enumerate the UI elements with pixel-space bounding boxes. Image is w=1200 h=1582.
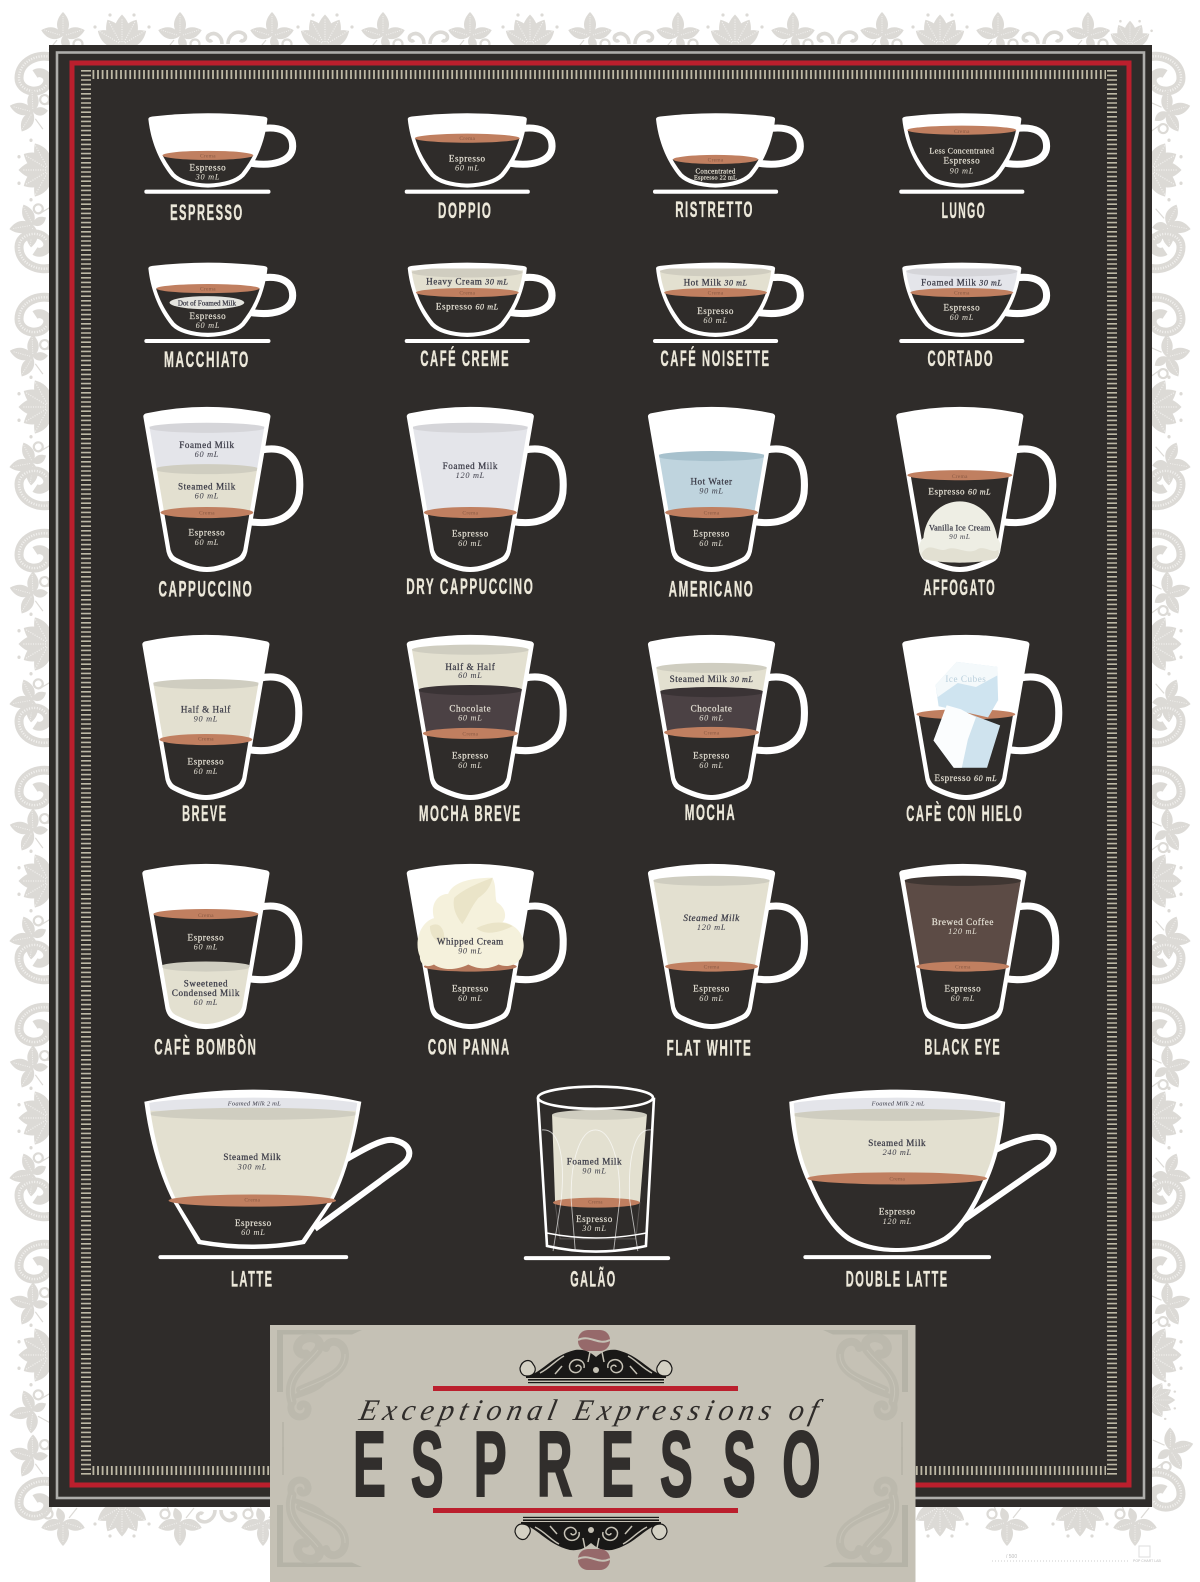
cup: latte: Crema xyxy=(244,1198,261,1204)
mug: cappuccino: Crema xyxy=(199,511,215,517)
cup: lungo: LUNGO xyxy=(942,198,986,223)
cup: espresso: Espresso xyxy=(190,163,226,173)
mug: cappuccino: 60 mL xyxy=(195,538,219,547)
mug: dry cappuccino xyxy=(400,407,563,599)
cup: double latte xyxy=(787,1090,1054,1291)
cup: espresso: 30 mL xyxy=(195,173,220,182)
mug: cafe bombon: Sweetened xyxy=(184,979,228,989)
cup: double latte: Espresso xyxy=(879,1207,916,1217)
glass: galao: GALÃO xyxy=(570,1266,617,1291)
bean top xyxy=(578,1330,610,1351)
bean bottom xyxy=(578,1549,610,1570)
mug: black eye: BLACK EYE xyxy=(924,1034,1001,1059)
mug: cafe con hielo: Ice Cubes xyxy=(945,674,986,684)
cup: cafe noisette: Espresso xyxy=(697,306,734,316)
mug: affogato: Vanilla Ice Cream xyxy=(929,524,991,533)
edition note: / 500 xyxy=(1006,1554,1017,1560)
cup: ristretto: Crema xyxy=(708,157,724,163)
cup: latte: LATTE xyxy=(231,1266,274,1291)
mug: flat white xyxy=(641,864,804,1060)
cup: macchiato: Crema xyxy=(200,287,216,293)
cup: cafe creme: Crema xyxy=(459,291,475,297)
red rule bottom xyxy=(433,1508,738,1513)
mug: affogato: 90 mL xyxy=(949,533,970,541)
mug: cafe con hielo xyxy=(895,635,1059,826)
mug: black eye: Crema xyxy=(955,965,971,971)
mug: americano: Espresso xyxy=(693,529,730,539)
mug: black eye: Espresso xyxy=(944,984,981,994)
mug: breve: 90 mL xyxy=(194,714,218,723)
cup: espresso: Crema xyxy=(200,153,216,159)
cup: cafe noisette: 60 mL xyxy=(703,316,728,325)
mug: dry cappuccino: Espresso xyxy=(452,529,489,539)
mug: cafe con hielo: Espresso 60 mL xyxy=(934,773,997,783)
cup: lungo xyxy=(899,113,1047,223)
mug: dry cappuccino: Foamed Milk xyxy=(443,461,498,471)
mug: breve: Crema xyxy=(198,737,214,743)
mug: con panna: CON PANNA xyxy=(428,1034,511,1059)
cup: macchiato xyxy=(144,263,293,372)
mug: cafe bombon: Condensed Milk xyxy=(172,988,240,998)
mug: affogato: Espresso 60 mL xyxy=(928,486,991,496)
mug: con panna: Whipped Cream xyxy=(437,936,504,946)
cup: latte xyxy=(141,1090,409,1291)
mug: breve: Espresso xyxy=(188,757,224,767)
cup: espresso: ESPRESSO xyxy=(170,200,244,225)
cup: latte: Steamed Milk xyxy=(223,1152,281,1162)
cup: doppio xyxy=(405,113,552,223)
mug: cafe bombon: 60 mL xyxy=(194,998,218,1007)
mug: con panna: 60 mL xyxy=(458,994,483,1003)
mug: mocha xyxy=(641,635,804,825)
cup: macchiato: 60 mL xyxy=(196,321,220,330)
glass: galao: Espresso xyxy=(576,1214,613,1224)
cup: cortado: Crema xyxy=(954,291,970,297)
mug: americano: Crema xyxy=(704,511,720,517)
mug: con panna xyxy=(400,864,563,1059)
mug: breve: BREVE xyxy=(182,801,228,826)
cup: latte: Foamed Milk 2 mL xyxy=(227,1101,281,1108)
cup: cortado: Foamed Milk 30 mL xyxy=(921,278,1002,288)
mug: cappuccino: 60 mL xyxy=(195,491,219,500)
mug: flat white: FLAT WHITE xyxy=(667,1035,752,1060)
edition note: POP CHART LAB xyxy=(1133,1559,1161,1563)
cup: latte: 60 mL xyxy=(241,1228,266,1237)
cup: cafe noisette: Hot Milk 30 mL xyxy=(684,278,748,288)
cup: double latte: 120 mL xyxy=(883,1217,912,1226)
edition note xyxy=(992,1546,1161,1563)
mug: breve: Half & Half xyxy=(181,704,231,714)
mug: cappuccino xyxy=(136,407,300,601)
mug: americano: Hot Water xyxy=(690,476,733,486)
mug: americano: 90 mL xyxy=(699,486,724,495)
mug: cappuccino: Foamed Milk xyxy=(179,440,235,450)
cup: espresso xyxy=(144,113,293,225)
mug: flat white: Espresso xyxy=(693,984,730,994)
glass: galao: Foamed Milk xyxy=(567,1156,622,1166)
mug: cafe bombon: CAFÈ BOMBÒN xyxy=(154,1034,257,1059)
mug: black eye: 120 mL xyxy=(948,927,977,936)
cup: cafe noisette: Crema xyxy=(708,291,724,297)
mug: mocha breve: 60 mL xyxy=(458,671,483,680)
cup: cortado: 60 mL xyxy=(950,313,974,322)
cup: cafe noisette: CAFÉ NOISETTE xyxy=(661,346,771,371)
mug: mocha: 60 mL xyxy=(699,761,724,770)
cup: cafe creme: CAFÉ CREME xyxy=(420,346,510,371)
mug: mocha: Espresso xyxy=(693,751,730,761)
cup: double latte: Crema xyxy=(889,1176,905,1182)
cup: lungo: Crema xyxy=(954,129,970,135)
mug: affogato: AFFOGATO xyxy=(923,575,996,600)
mug: mocha breve: Espresso xyxy=(452,751,489,761)
cup: doppio: Espresso xyxy=(449,153,486,163)
cup: macchiato: Dot of Foamed Milk xyxy=(178,300,236,308)
mug: americano xyxy=(641,407,804,601)
mug: cafe bombon: 60 mL xyxy=(194,942,218,951)
mug: mocha: 60 mL xyxy=(699,713,724,722)
cup: latte: 300 mL xyxy=(237,1162,267,1171)
cup: cafe creme: Espresso 60 mL xyxy=(436,302,499,312)
cup: lungo: Less Concentrated xyxy=(929,146,994,155)
cup: double latte: Foamed Milk 2 mL xyxy=(871,1101,925,1108)
mug: breve xyxy=(135,635,299,826)
cup: double latte: DOUBLE LATTE xyxy=(846,1266,949,1291)
mug: cappuccino: 60 mL xyxy=(195,450,219,459)
mug: black eye: 60 mL xyxy=(951,994,975,1003)
title main: ESPRESSO xyxy=(353,1412,821,1516)
mug: mocha: Crema xyxy=(704,730,720,736)
mug: mocha breve: MOCHA BREVE xyxy=(419,801,522,826)
mug: cafe con hielo: CAFÈ CON HIELO xyxy=(906,801,1023,826)
mug: mocha breve xyxy=(400,635,563,826)
mug: americano: AMERICANO xyxy=(669,576,754,601)
cup: ristretto: Espresso 22 mL xyxy=(694,175,737,182)
mug: mocha: MOCHA xyxy=(685,800,736,825)
cup: cafe creme: Heavy Cream 30 mL xyxy=(426,277,508,287)
title plate xyxy=(270,1325,916,1582)
mug: con panna: Espresso xyxy=(452,984,489,994)
mug: dry cappuccino: DRY CAPPUCCINO xyxy=(406,574,534,599)
mug: mocha breve: Crema xyxy=(462,731,479,737)
mug: black eye: Brewed Coffee xyxy=(932,917,994,927)
cup: cafe creme xyxy=(405,263,552,371)
cup: double latte: 240 mL xyxy=(883,1148,912,1157)
cup: lungo: Espresso xyxy=(943,155,980,165)
mug: cappuccino: Espresso xyxy=(189,528,225,538)
mug: mocha breve: Chocolate xyxy=(449,703,491,713)
mug: mocha breve: 60 mL xyxy=(458,713,483,722)
cup: ristretto xyxy=(653,113,800,222)
mug: flat white: 60 mL xyxy=(699,994,724,1003)
title script: Exceptional Expressions of xyxy=(356,1393,825,1427)
mug: dry cappuccino: Crema xyxy=(462,511,479,517)
mug: mocha: Chocolate xyxy=(691,703,732,713)
glass: galao: 90 mL xyxy=(582,1166,607,1175)
cup: doppio: 60 mL xyxy=(455,164,480,173)
mug: black eye xyxy=(892,864,1056,1059)
mug: cappuccino: Steamed Milk xyxy=(178,481,236,491)
ornament top xyxy=(520,1350,672,1383)
cup: doppio: Crema xyxy=(459,136,475,142)
mug: con panna: 90 mL xyxy=(458,946,483,955)
cup: lungo: 90 mL xyxy=(950,167,974,176)
cup: doppio: DOPPIO xyxy=(438,198,493,223)
glass: galao: 30 mL xyxy=(581,1224,607,1233)
cup: latte: Espresso xyxy=(235,1218,272,1228)
mug: mocha: Steamed Milk 30 mL xyxy=(670,674,753,684)
mug: flat white: Steamed Milk xyxy=(683,913,740,923)
mug: cappuccino: CAPPUCCINO xyxy=(158,576,253,601)
mug: dry cappuccino: 120 mL xyxy=(456,471,485,480)
mug: cafe bombon: Espresso xyxy=(188,932,224,942)
glass: galao: Crema xyxy=(588,1200,603,1206)
mug: dry cappuccino: 60 mL xyxy=(458,539,483,548)
mug: americano: 60 mL xyxy=(699,539,724,548)
mug: breve: 60 mL xyxy=(194,767,218,776)
mug: mocha breve: Half & Half xyxy=(445,662,496,672)
cup: ristretto: Concentrated xyxy=(695,169,736,176)
mug: flat white: Crema xyxy=(704,965,720,971)
cup: cafe noisette xyxy=(653,263,800,371)
cup: macchiato: Espresso xyxy=(190,311,226,321)
mug: affogato: Crema xyxy=(952,474,968,480)
mug: mocha breve: 60 mL xyxy=(458,761,483,770)
mug: cafe bombon xyxy=(135,864,299,1059)
cup: cortado: CORTADO xyxy=(928,346,994,371)
glass: galao xyxy=(524,1087,670,1291)
red rule top xyxy=(433,1386,738,1391)
cup: ristretto: RISTRETTO xyxy=(675,197,754,222)
mug: affogato xyxy=(889,407,1053,600)
cup: macchiato: MACCHIATO xyxy=(164,347,250,372)
ornament bottom xyxy=(515,1517,667,1550)
mug: flat white: 120 mL xyxy=(697,923,726,932)
mug: cafe bombon: Crema xyxy=(198,913,214,919)
cup: double latte: Steamed Milk xyxy=(868,1138,926,1148)
cup: cortado xyxy=(899,263,1047,371)
cup: cortado: Espresso xyxy=(943,303,980,313)
